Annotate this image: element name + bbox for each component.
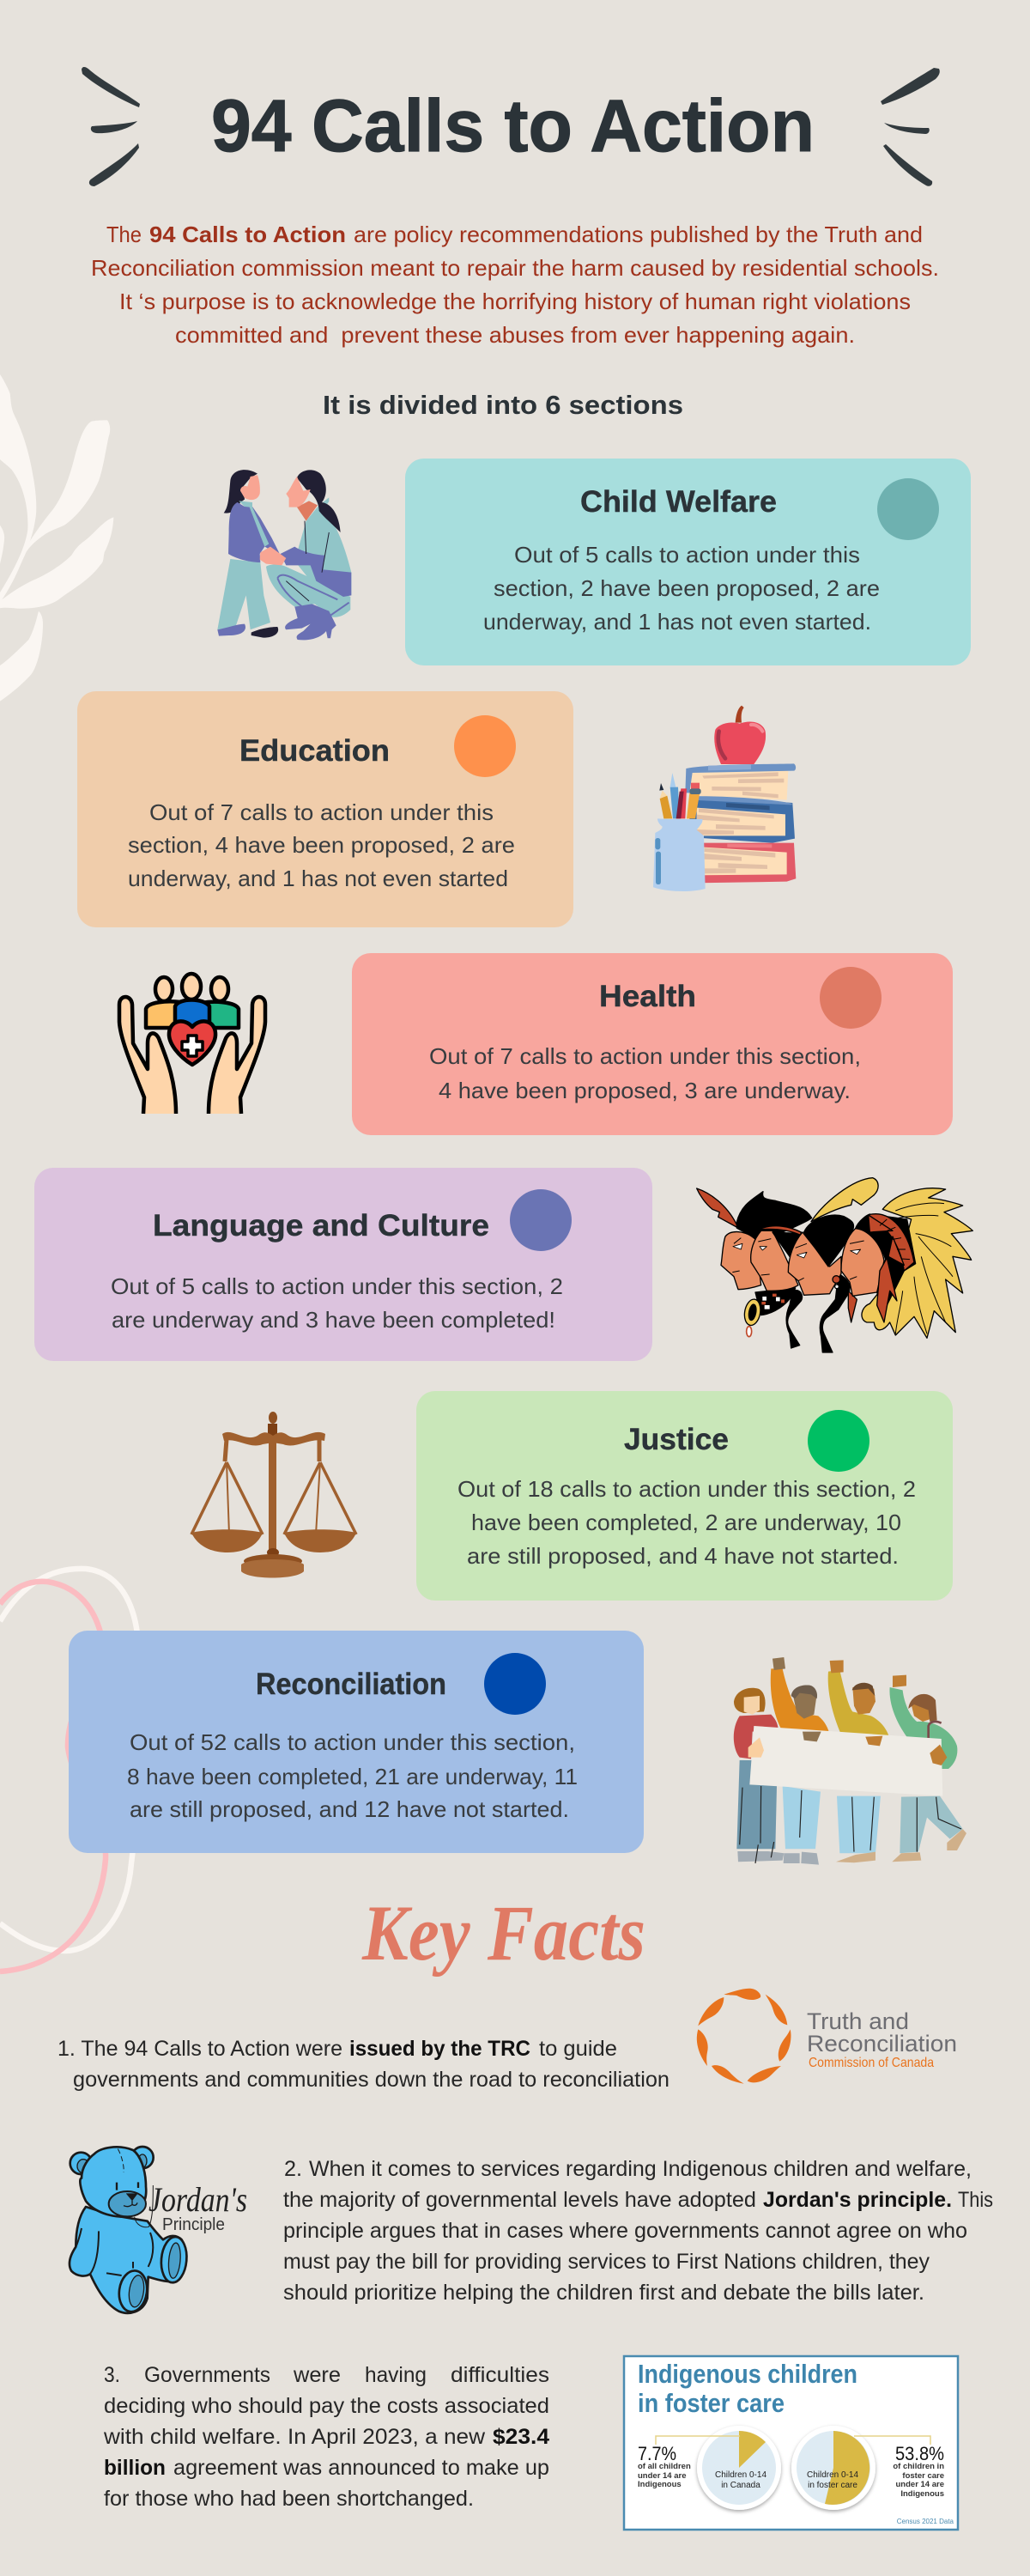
stat: 53.8%: foster care	[902, 2471, 944, 2481]
pie: children in foster care: in foster care	[808, 2481, 857, 2490]
fact 3 text: deciding who should pay the costs associated	[104, 2394, 549, 2418]
fact 1 text: governments and communities down the road to reconciliation	[73, 2068, 670, 2092]
text: child welfare status: underway, and 1 has not even started.	[483, 609, 871, 635]
fact 2 text	[283, 2157, 993, 2305]
stat: 7.7%: Indigenous	[638, 2480, 682, 2489]
text: language and culture status: Out of 5 calls to action under this section, 2	[111, 1273, 563, 1299]
chart title: in foster care	[638, 2388, 785, 2418]
stat: 7.7%: under 14 are	[638, 2471, 687, 2481]
fact 3 text: $23.4	[493, 2425, 549, 2449]
panel: language and culture	[34, 1168, 652, 1361]
pie: children in Canada	[697, 2426, 781, 2510]
fact 2 text: This	[958, 2188, 993, 2212]
text: justice status: are still proposed, and 4 have not started.	[467, 1543, 899, 1569]
section intro heading: It is divided into 6 sections	[323, 390, 683, 420]
logo: Truth and Reconciliation Commission of Canada: Commission of Canada	[809, 2056, 934, 2070]
fact 2 text: principle argues that in cases where governments cannot agree on who	[283, 2219, 967, 2243]
logo: Truth and Reconciliation Commission of Canada	[697, 1989, 957, 2084]
logo: Truth and Reconciliation Commission of Canada: Truth and	[807, 2008, 909, 2034]
heading: health: Health	[599, 980, 696, 1013]
heading: education: Education	[239, 734, 390, 768]
fact 3 text: difficulties	[451, 2363, 549, 2387]
intro paragraph: It ‘s purpose is to acknowledge the horrifying history of human right violations	[119, 289, 911, 314]
panel: education	[77, 691, 573, 927]
fact 3 text: 3.	[104, 2363, 120, 2387]
icon: protesters holding a banner	[734, 1657, 966, 1865]
heading: language and culture: Language and Culture	[153, 1209, 489, 1242]
text: health status: Out of 7 calls to action under this section,	[429, 1043, 861, 1069]
chart title	[638, 2359, 857, 2418]
icon: caring hands with people and heart	[119, 974, 265, 1114]
stat: 7.7%	[638, 2443, 691, 2489]
text: education status: underway, and 1 has not even started	[128, 866, 508, 891]
panel: justice	[416, 1391, 953, 1601]
text: reconciliation status: Out of 52 calls to action under this section,	[130, 1729, 575, 1755]
text: language and culture status: are underway and 3 have been completed!	[112, 1307, 555, 1333]
text: justice status: Out of 18 calls to action under this section, 2	[457, 1476, 916, 1502]
intro paragraph: are policy recommendations published by the Truth and	[354, 222, 923, 247]
text: education status	[128, 799, 515, 891]
intro paragraph: 94 Calls to Action	[149, 222, 346, 247]
stat: 7.7%: 7.7%	[638, 2443, 676, 2464]
fact 3 text	[103, 2363, 549, 2511]
stat: 7.7%: of all children	[638, 2462, 691, 2471]
text: health status	[429, 1043, 861, 1103]
fact 3 text: billion	[104, 2456, 166, 2480]
chart: Indigenous children in foster care	[624, 2356, 958, 2530]
pie: children in Canada: in Canada	[721, 2481, 760, 2490]
text: child welfare status: section, 2 have been proposed, 2 are	[494, 575, 880, 601]
heading: key facts: Key Facts	[361, 1889, 645, 1977]
text: reconciliation status: are still proposed, and 12 have not started.	[130, 1796, 569, 1822]
logo: Jordan's Principle teddy bear: Principle	[162, 2215, 225, 2234]
fact 3 text: for those who had been shortchanged.	[104, 2487, 474, 2511]
text: education status: Out of 7 calls to action under this	[149, 799, 494, 825]
fact 1 text: issued by the TRC	[349, 2037, 530, 2061]
fact 3 text: agreement was announced to make up	[173, 2456, 549, 2480]
fact 2 text: should prioritize helping the children first and debate the bills later.	[283, 2281, 924, 2305]
chart title: Indigenous children	[638, 2359, 857, 2389]
pie: children in foster care	[791, 2426, 876, 2510]
fact 3 text: having	[365, 2363, 427, 2387]
title burst strokes	[82, 67, 940, 186]
text: reconciliation status	[127, 1729, 578, 1822]
text: education status: section, 4 have been proposed, 2 are	[128, 832, 515, 858]
fact 3 text: were	[293, 2363, 341, 2387]
text: reconciliation status: 8 have been completed, 21 are underway, 11	[127, 1764, 578, 1789]
fact 2 text: 2.	[284, 2157, 302, 2181]
intro paragraph: committed and prevent these abuses from ever happening again.	[175, 322, 855, 348]
decorative leaf branch	[0, 374, 113, 702]
panel: child welfare	[405, 459, 971, 665]
text: language and culture status	[111, 1273, 563, 1333]
fact 3 text: with child welfare. In April 2023, a new	[103, 2425, 486, 2449]
icon: scales of justice	[191, 1412, 356, 1578]
fact 2 text: must pay the bill for providing services to First Nations children, they	[283, 2250, 930, 2274]
stat: 53.8%	[893, 2443, 944, 2499]
icon: mother and child	[217, 470, 351, 640]
heading: reconciliation: Reconciliation	[256, 1668, 446, 1701]
icon: books, apple and pencils	[653, 706, 796, 891]
text: justice status: have been completed, 2 are underway, 10	[471, 1510, 901, 1535]
fact 1 text: to guide	[539, 2037, 617, 2061]
fact 3 text: Governments	[144, 2363, 270, 2387]
fact 2 text: When it comes to services regarding Indigenous children and welfare,	[309, 2157, 972, 2181]
panel: reconciliation	[69, 1631, 644, 1853]
text: child welfare status: Out of 5 calls to action under this	[514, 542, 860, 568]
stat: 53.8%: 53.8%	[895, 2443, 944, 2464]
title: 94 Calls to Action	[211, 85, 815, 167]
heading: justice: Justice	[624, 1423, 729, 1456]
text: child welfare status	[483, 542, 880, 635]
logo: Jordan's Principle teddy bear	[70, 2147, 247, 2313]
decorative scribble loops	[0, 1569, 139, 1971]
pie: children in foster care: Children 0-14	[807, 2470, 858, 2480]
intro paragraph: Reconciliation commission meant to repair the harm caused by residential schools.	[91, 255, 939, 281]
stat: 53.8%: under 14 are	[896, 2480, 944, 2489]
logo: Truth and Reconciliation Commission of Canada: Reconciliation	[807, 2031, 957, 2057]
icon: four Indigenous faces with feathers	[697, 1178, 972, 1352]
fact 2 text: the majority of governmental levels have adopted	[283, 2188, 756, 2212]
stat: 53.8%: Indigenous	[900, 2489, 944, 2499]
heading: child welfare: Child Welfare	[580, 485, 777, 519]
text: health status: 4 have been proposed, 3 are underway.	[439, 1078, 851, 1103]
fact 1 text	[58, 2037, 670, 2092]
pie: children in Canada: Children 0-14	[715, 2470, 766, 2480]
fact 1 text: 1. The 94 Calls to Action were	[58, 2037, 342, 2061]
fact 2 text: Jordan's principle.	[763, 2188, 952, 2212]
logo: Jordan's Principle teddy bear: Jordan's	[148, 2180, 247, 2219]
text: justice status	[457, 1476, 916, 1569]
chart source note: Census 2021 Data	[897, 2518, 954, 2525]
intro paragraph: The	[106, 222, 142, 247]
intro paragraph	[91, 222, 939, 348]
stat: 53.8%: of children in	[893, 2462, 944, 2471]
panel: health	[352, 953, 953, 1135]
